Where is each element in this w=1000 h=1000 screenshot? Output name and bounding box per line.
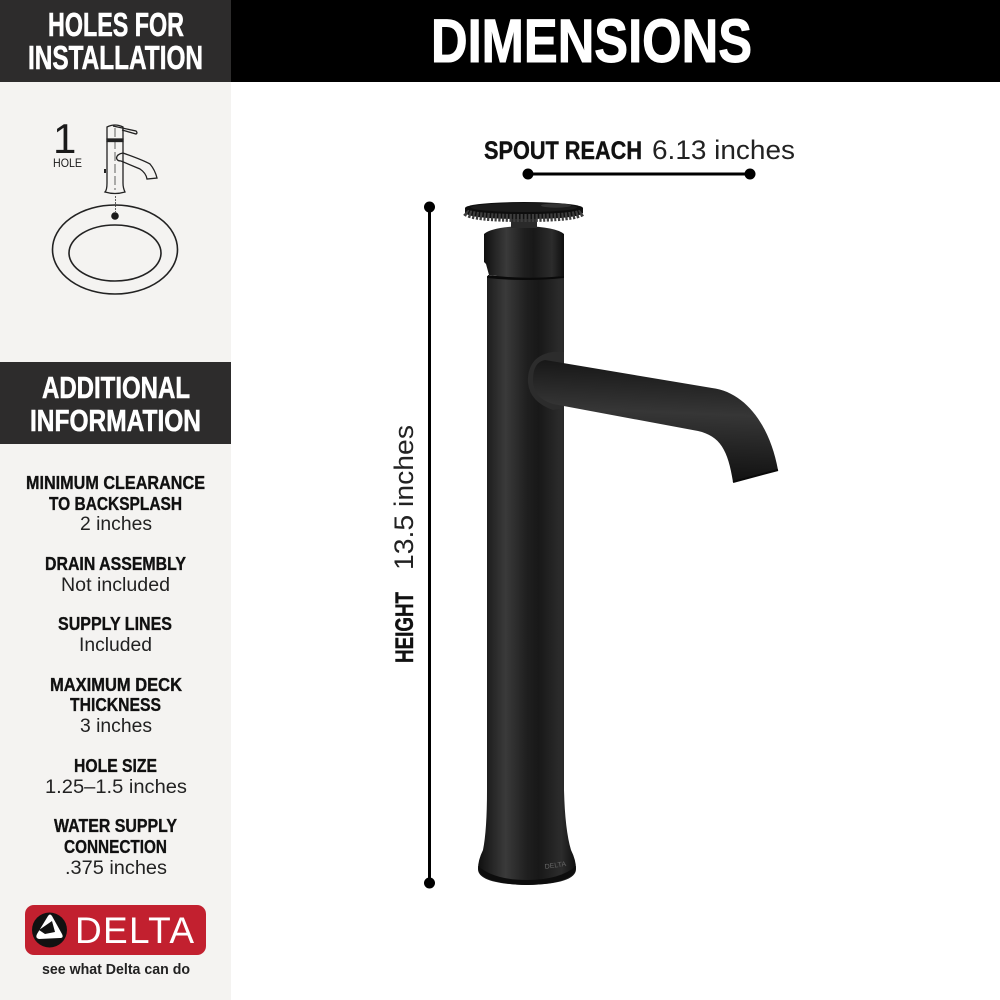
header: holes for installation <box>0 0 231 82</box>
text: hole size <box>45 755 187 798</box>
text: water supply connection: .375 inches <box>65 858 167 879</box>
text: drain assembly: DRAIN ASSEMBLY <box>45 553 187 574</box>
faucet: cap <box>484 226 564 278</box>
header: additional information: ADDITIONAL <box>42 370 190 405</box>
faucet: spout flange <box>528 352 564 410</box>
arrow: spout reach dimension <box>522 168 756 180</box>
faucet: base ring <box>478 866 576 885</box>
title: dimensions: DIMENSIONS <box>431 7 752 75</box>
label: height <box>389 425 419 663</box>
header: holes for installation: HOLES FOR <box>48 6 184 43</box>
faucet: spout lip <box>733 470 778 482</box>
faucet: stem <box>511 216 537 228</box>
faucet: spout <box>533 360 778 482</box>
text: maximum deck thickness <box>50 674 183 737</box>
text: drain assembly <box>45 553 187 596</box>
icon: basin <box>52 205 178 294</box>
logo: delta <box>25 905 206 978</box>
label: spout reach: 6.13 inches <box>652 135 795 165</box>
text: supply lines <box>58 613 172 656</box>
text: minimum clearance: TO BACKSPLASH <box>49 493 182 514</box>
label: spout reach: SPOUT REACH <box>484 137 642 165</box>
label: 1 hole <box>53 115 82 170</box>
logo: delta: see what Delta can do <box>42 961 190 978</box>
label: height: 13.5 inches <box>389 425 419 570</box>
text: maximum deck thickness: 3 inches <box>80 716 152 737</box>
text: hole size: HOLE SIZE <box>74 755 157 776</box>
faucet <box>465 202 778 885</box>
faucet: wheel handle <box>465 202 583 219</box>
faucet: body <box>478 276 576 885</box>
header: additional information: INFORMATION <box>30 403 201 438</box>
text: drain assembly: Not included <box>61 575 170 596</box>
text: maximum deck thickness: MAXIMUM DECK <box>50 674 183 695</box>
text: maximum deck thickness: THICKNESS <box>70 694 161 715</box>
icon: small faucet <box>105 125 157 212</box>
text: minimum clearance <box>26 472 205 535</box>
text: minimum clearance: MINIMUM CLEARANCE <box>26 472 205 493</box>
faucet: seam <box>487 275 564 280</box>
title: dimensions <box>231 0 1000 82</box>
icon: delta mark <box>32 912 67 948</box>
text: water supply connection <box>54 815 178 879</box>
header: holes for installation: INSTALLATION <box>28 39 203 76</box>
header: additional information <box>0 362 231 444</box>
text: minimum clearance: 2 inches <box>80 514 152 535</box>
icon: one hole faucet and basin <box>52 115 178 294</box>
panel: sidebar <box>0 0 231 1000</box>
text: water supply connection: WATER SUPPLY <box>54 815 178 836</box>
text: supply lines: SUPPLY LINES <box>58 613 172 634</box>
text: hole size: 1.25–1.5 inches <box>45 777 187 798</box>
text: faucet brand mark: DELTA <box>544 861 567 871</box>
label: spout reach <box>484 135 795 165</box>
label: height: HEIGHT <box>391 592 419 663</box>
text: supply lines: Included <box>79 635 152 656</box>
label: 1 hole: HOLE <box>53 156 82 170</box>
arrow: height dimension <box>424 202 435 888</box>
text: water supply connection: CONNECTION <box>64 836 167 857</box>
logo: delta: DELTA <box>75 910 194 951</box>
label: 1 hole: 1 <box>53 115 76 162</box>
